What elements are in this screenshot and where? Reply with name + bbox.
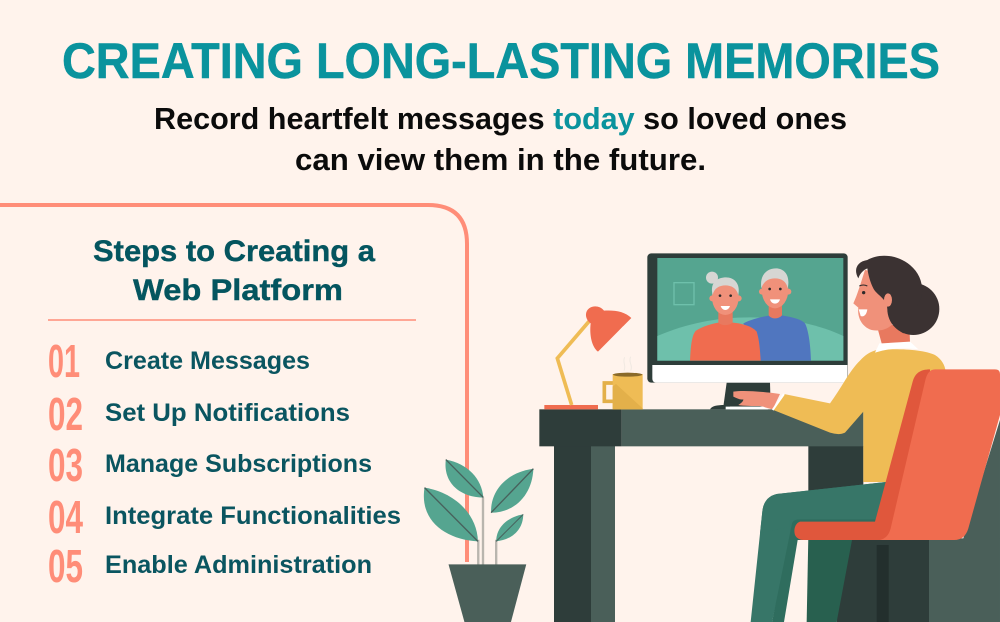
office chair (794, 369, 1000, 540)
chair base (837, 420, 1000, 622)
hair (856, 256, 939, 335)
panel heading (93, 235, 375, 307)
panel heading: Web Platform (133, 274, 343, 307)
desk (539, 409, 863, 622)
panel heading: Steps to Creating a (93, 235, 375, 268)
mug (604, 357, 643, 409)
step 1: 01 (48, 335, 80, 387)
hand (733, 391, 780, 409)
subtitle: can view them in the future. (295, 142, 706, 177)
panel: steps border (0, 205, 467, 562)
step 5 (48, 540, 372, 592)
head (853, 270, 900, 331)
icon: potted plant (424, 460, 533, 622)
step 4 (48, 491, 401, 543)
step 3: Manage Subscriptions (105, 450, 372, 478)
back leg (807, 537, 853, 622)
man on screen (743, 268, 811, 361)
step 1 (48, 335, 310, 387)
front leg and thigh (751, 482, 886, 622)
step 5: 05 (48, 540, 83, 592)
step 4: 04 (48, 491, 83, 543)
torso and sleeve (773, 349, 946, 482)
subtitle (154, 101, 847, 177)
step 3 (48, 439, 372, 491)
step 2 (48, 388, 350, 440)
lamp (544, 306, 631, 409)
step 4: Integrate Functionalities (105, 502, 401, 530)
woman at desk (726, 256, 946, 622)
title: CREATING LONG-LASTING MEMORIES (62, 33, 940, 89)
step 3: 03 (48, 439, 83, 491)
monitor (647, 253, 848, 409)
step 2: 02 (48, 388, 83, 440)
step 5: Enable Administration (105, 551, 372, 579)
neck (877, 325, 910, 343)
step 1: Create Messages (105, 347, 310, 375)
collar (875, 342, 918, 353)
subtitle: Record heartfelt messages today so loved ones (154, 101, 847, 136)
illustration: woman at desk on video call (539, 253, 1000, 622)
woman on screen (690, 272, 761, 361)
step 2: Set Up Notifications (105, 399, 350, 427)
